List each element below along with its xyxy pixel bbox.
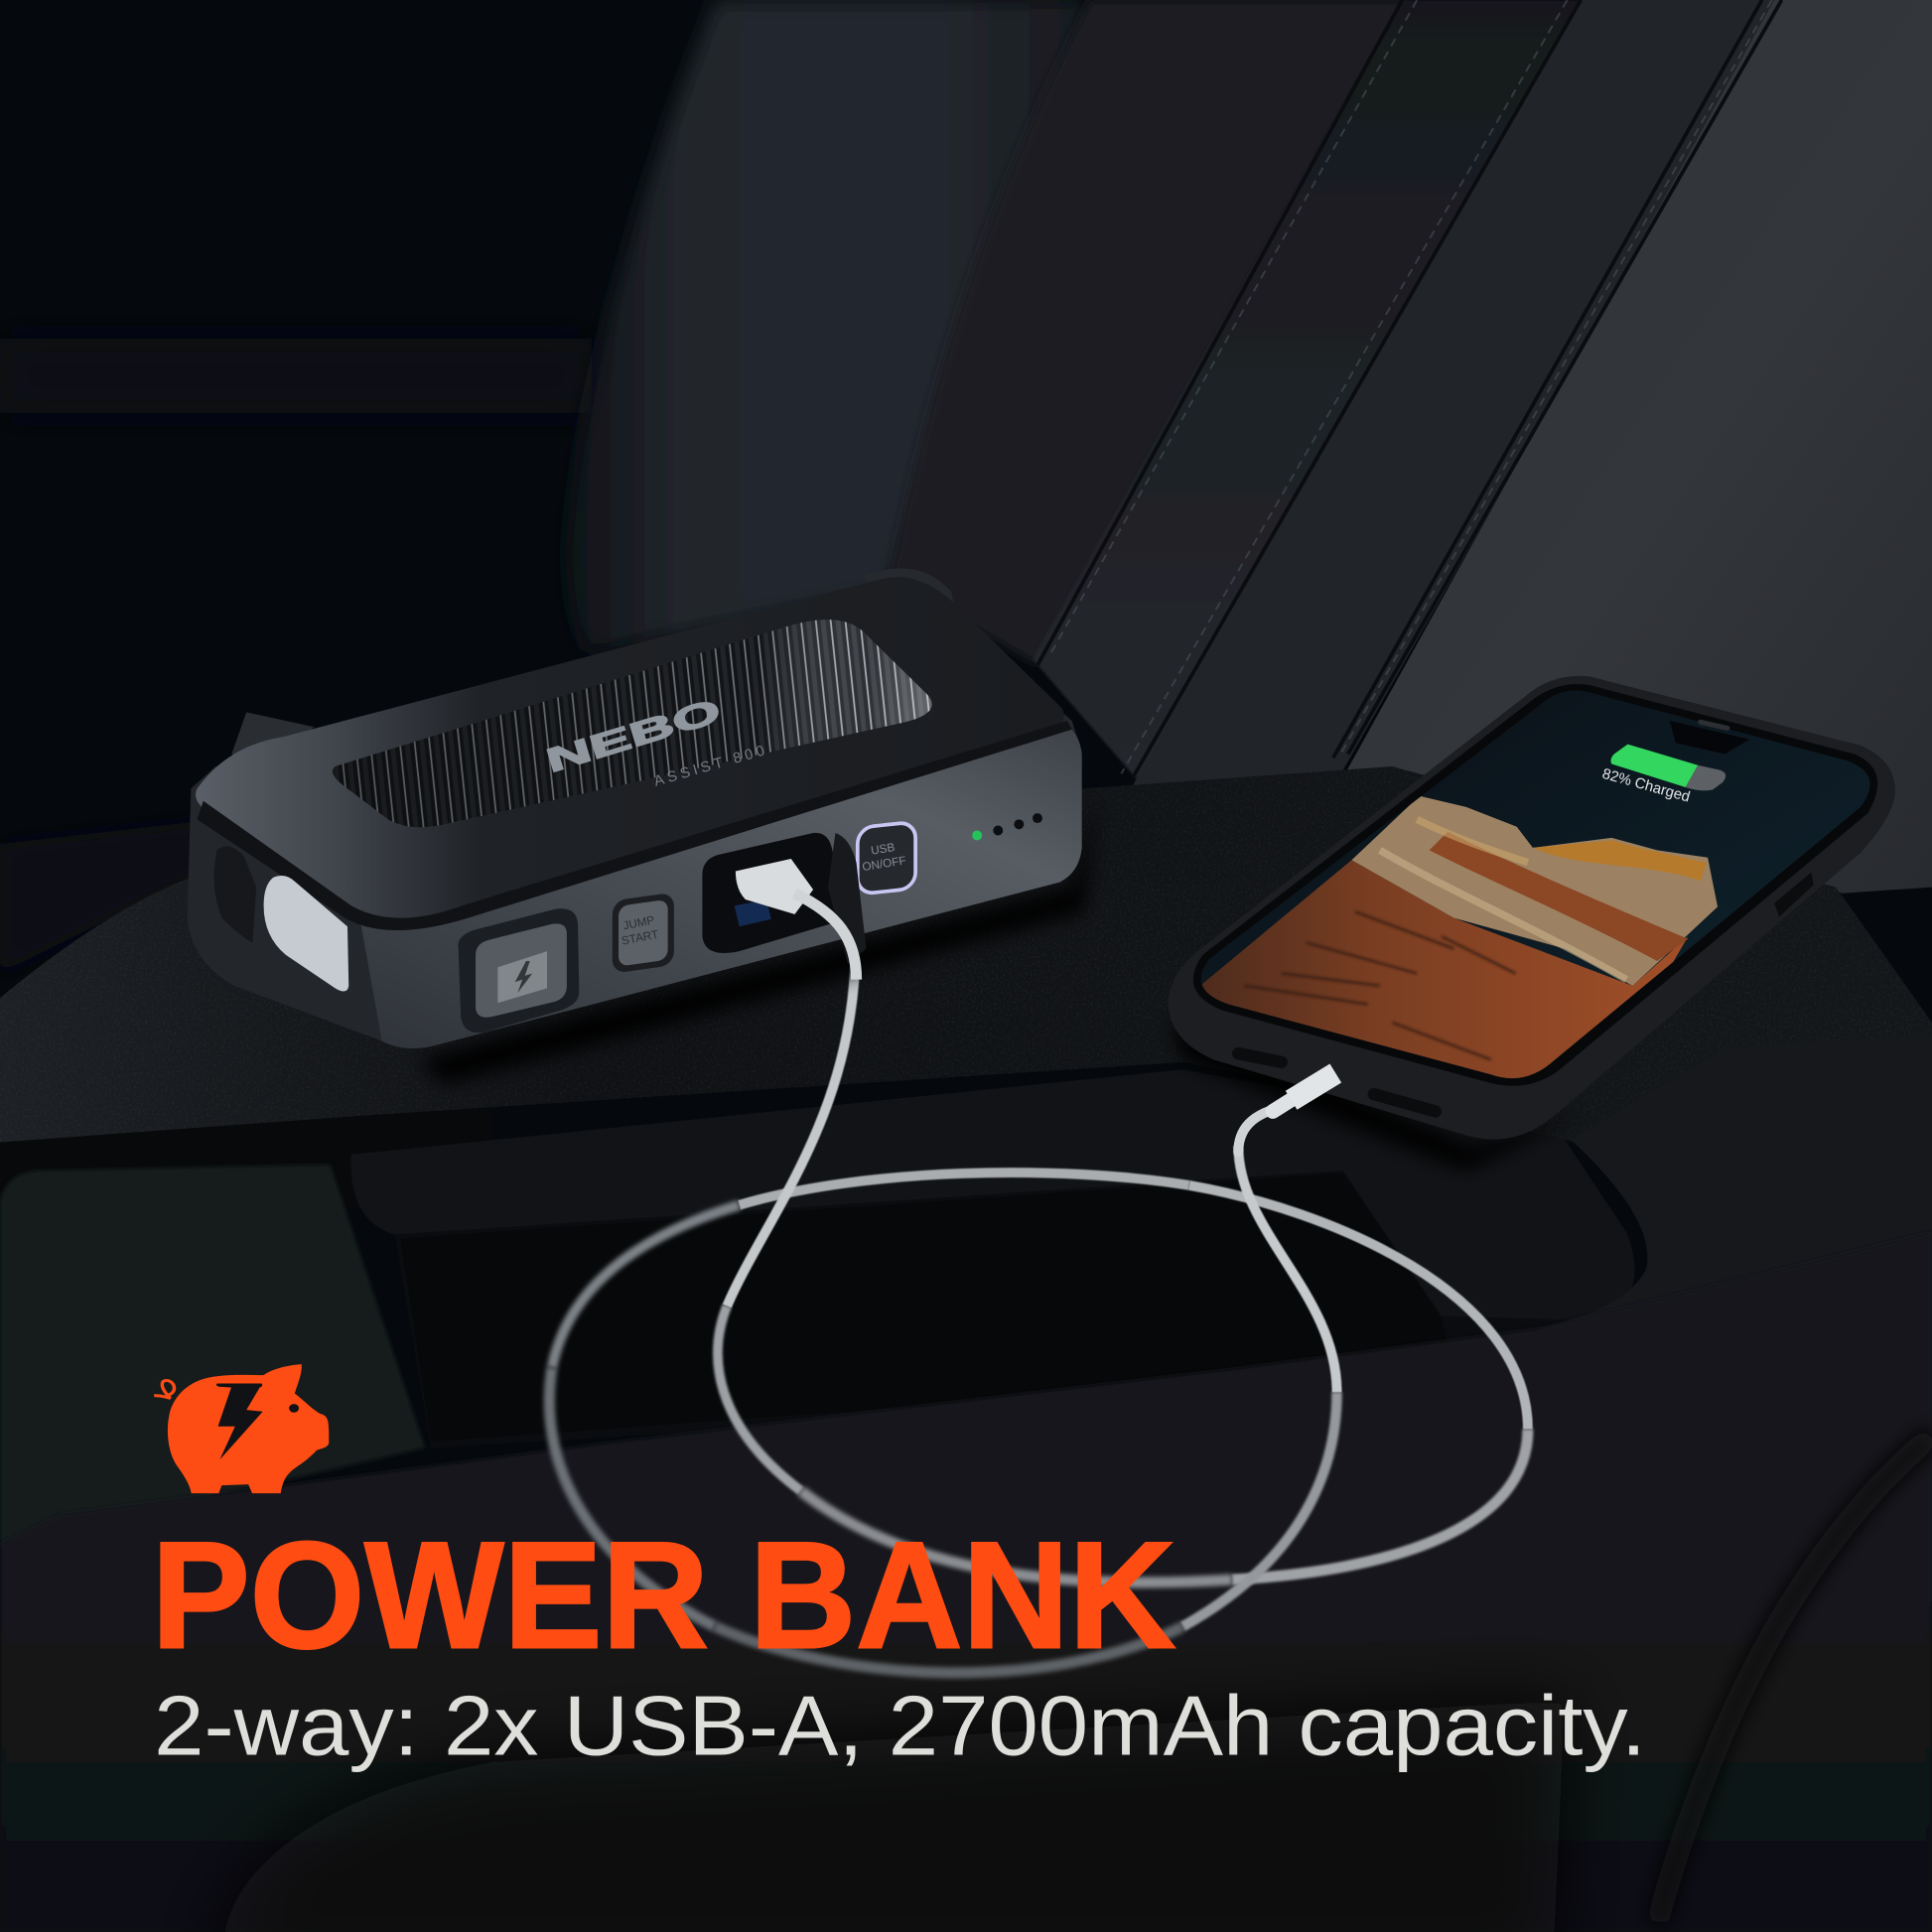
- NEBO logo: NEBO: [542, 693, 725, 780]
- USB on/off button: [858, 822, 915, 895]
- icon: piggy bank with lightning bolt: [154, 1364, 329, 1493]
- LED indicators: [972, 813, 1042, 840]
- phone side button: [1774, 873, 1814, 916]
- cable top over flap: [794, 894, 857, 980]
- battery button: [458, 908, 579, 1033]
- wallpaper rock: [1351, 796, 1718, 986]
- smartphone: [1169, 676, 1895, 1171]
- rear seat dark area: [0, 339, 592, 973]
- phone screen: [1201, 691, 1870, 1078]
- power bank device: [188, 568, 1082, 1048]
- phone case: [1169, 676, 1895, 1140]
- phone bottom ports: [1238, 1053, 1436, 1111]
- tray well: [400, 1173, 1453, 1442]
- seat stitching: [1037, 0, 1782, 776]
- device top rubber frame: [196, 577, 1064, 918]
- bottom darker cushion shadow: [209, 1701, 1565, 1932]
- lower seat cushion: [0, 1232, 1932, 1932]
- wallpaper ground: [1171, 860, 1688, 1084]
- armrest leather grain: [0, 769, 1929, 1140]
- phone shadow: [1171, 1017, 1589, 1171]
- USB plug: [736, 859, 813, 914]
- backrest leather strip: [1033, 0, 1581, 782]
- lower console panel: [0, 1165, 425, 1547]
- armrest and console: [0, 763, 1932, 1601]
- port flap: [828, 833, 866, 964]
- USB on/off button: ON/OFF: [862, 854, 907, 874]
- USB-C connector and cable end: [1238, 1073, 1335, 1152]
- battery label: 82% Charged: [1600, 766, 1692, 806]
- armrest leather: [0, 766, 1932, 1232]
- backrest centre panel: [890, 0, 1411, 665]
- device shadow: [419, 788, 1097, 1084]
- backrest left bolster: [567, 0, 1090, 653]
- dark gap behind console: [0, 1109, 492, 1207]
- front rubber lip: [198, 721, 1072, 930]
- backrest right fabric: [1337, 0, 1932, 894]
- ASSIST 800 label: ASSIST 800: [652, 743, 770, 790]
- phone speaker: [1701, 722, 1727, 728]
- wallpaper dark streaks: [1244, 911, 1516, 1059]
- ribbed panel: [333, 620, 932, 828]
- jump start button: [613, 893, 674, 974]
- notch: [1670, 721, 1749, 755]
- jump start button: JUMP: [621, 913, 656, 932]
- device rear hooks: [231, 712, 314, 770]
- side power button: [214, 847, 256, 942]
- jump start button: START: [621, 928, 659, 948]
- backrest fabric panel: [1131, 0, 1782, 788]
- title: POWER BANK: [152, 1511, 1175, 1680]
- phone bezel: [1193, 684, 1877, 1086]
- tray rim: [350, 1069, 1634, 1320]
- device front metal band: [359, 727, 1082, 1048]
- side light: [264, 876, 348, 992]
- console tray: [351, 1069, 1634, 1448]
- right side console: [1478, 1035, 1932, 1601]
- charging cable: [549, 961, 1528, 1673]
- seat backrest: [567, 0, 1932, 894]
- battery icon: [1610, 745, 1725, 790]
- seatbelt shadow: [1657, 1436, 1932, 1922]
- device body: [188, 579, 1082, 1048]
- second USB port: [735, 899, 771, 926]
- subtitle: 2-way: 2x USB-A, 2700mAh capacity.: [154, 1678, 1646, 1773]
- USB port recess: [702, 833, 850, 953]
- USB on/off button: USB: [870, 841, 896, 858]
